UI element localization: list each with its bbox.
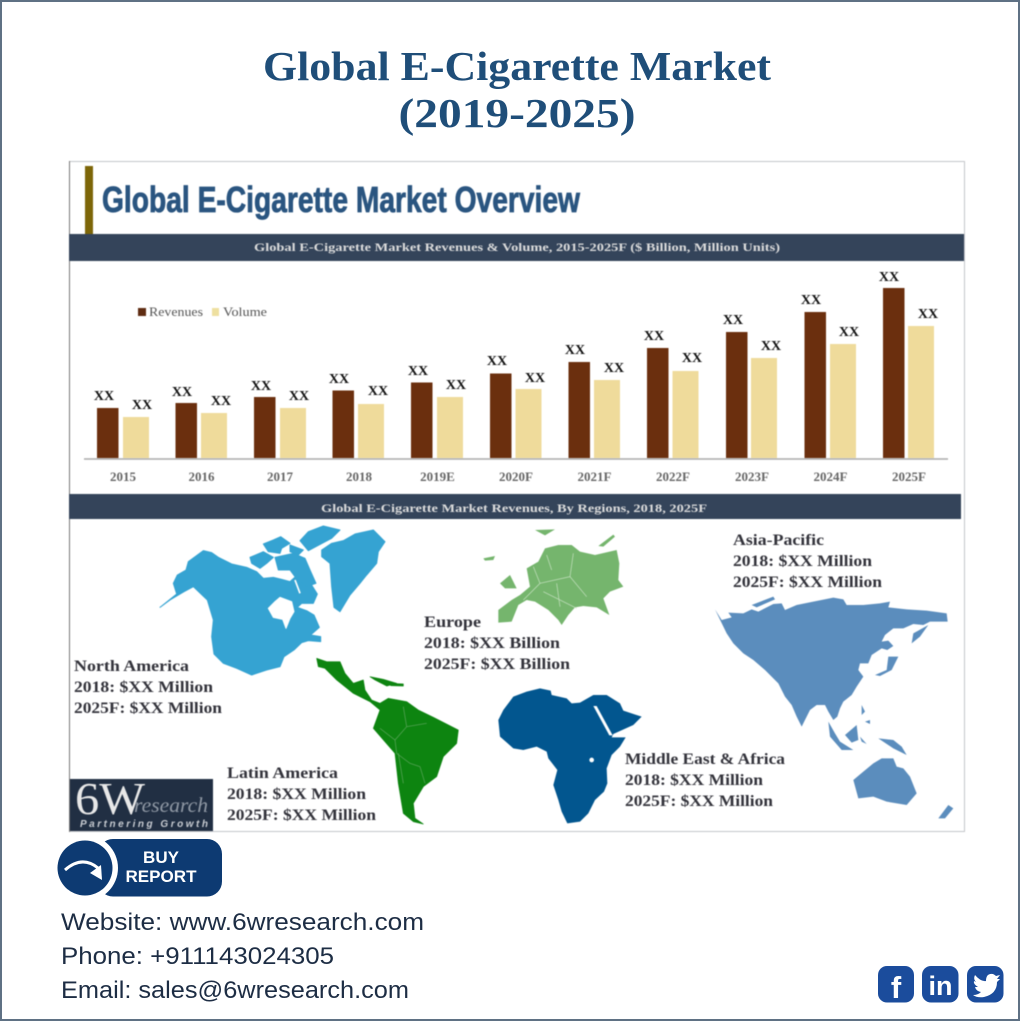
bar chart (84, 270, 948, 484)
overview heading (85, 166, 581, 234)
bar chart: XX (682, 351, 702, 366)
bar chart: XX (368, 384, 388, 399)
contact details: Email: sales@6wresearch.com (61, 977, 409, 1004)
bar chart: XX (723, 313, 743, 328)
chart header bar (69, 234, 964, 261)
logo: 6W research: 6W (75, 773, 146, 824)
bar chart: 2020F (499, 469, 533, 484)
button: buy report (52, 835, 222, 901)
label: North America (74, 658, 222, 717)
label: Middle East and Africa: 2018: $XX Million (625, 772, 763, 789)
bar chart: 2016 (188, 469, 215, 484)
regions header bar (69, 494, 961, 519)
label: North America: 2025F: $XX Million (74, 700, 222, 717)
bar chart: XX (487, 354, 507, 369)
bar chart: XX (918, 307, 938, 322)
logo: 6W research (70, 773, 213, 831)
bar chart: XX (801, 293, 821, 308)
chart header bar: Global E-Cigarette Market Revenues & Volume, 2015-2025F ($ Billion, Million Units) (254, 241, 780, 254)
label: Europe: 2025F: $XX Billion (424, 656, 570, 673)
icon: linkedin: in (928, 971, 952, 1001)
bar chart: XX (329, 372, 349, 387)
bar chart: 2023F (735, 469, 769, 484)
label: North America: 2018: $XX Million (74, 679, 213, 696)
contact details: Website: www.6wresearch.com (61, 909, 424, 936)
label: Asia-Pacific: Asia-Pacific (733, 532, 824, 549)
bar chart: XX (251, 379, 271, 394)
chart legend: Revenues (149, 305, 203, 319)
bar chart: XX (132, 398, 152, 413)
bar chart: 2019E (420, 469, 455, 484)
bar chart: 2025F (892, 469, 926, 484)
panel: market overview (69, 161, 964, 832)
bar chart: XX (94, 389, 114, 404)
button: buy report: BUY (143, 848, 180, 867)
title: (2019-2025) (398, 90, 636, 136)
map: Middle East and Africa (498, 688, 642, 823)
bar chart: XX (289, 389, 309, 404)
chart legend: Volume (223, 305, 268, 319)
bar chart: XX (211, 394, 231, 409)
map: North America (160, 526, 385, 675)
icon: facebook: f (891, 970, 902, 1005)
bar chart: 2022F (656, 469, 690, 484)
label: Asia-Pacific: 2018: $XX Million (733, 553, 872, 570)
icon: twitter (967, 966, 1004, 1002)
map: Asia-Pacific (715, 597, 953, 818)
regions header bar: Global E-Cigarette Market Revenues, By Regions, 2018, 2025F (321, 503, 707, 515)
bar chart: 2018 (346, 469, 372, 484)
icon: linkedin (922, 966, 958, 1002)
title: Global E-Cigarette Market (263, 43, 771, 89)
map: Latin America (317, 658, 458, 824)
bar chart: 2021F (578, 469, 612, 484)
bar chart: XX (525, 371, 545, 386)
contact details (61, 909, 424, 1004)
bar chart: 2017 (267, 469, 294, 484)
label: Middle East and Africa: Middle East & Africa (625, 751, 785, 768)
label: Asia-Pacific (733, 532, 882, 591)
contact details: Phone: +911143024305 (61, 943, 334, 970)
chart legend (138, 305, 268, 319)
bar chart: XX (644, 329, 664, 344)
button: buy report: REPORT (126, 867, 197, 886)
bar chart: 2024F (814, 469, 848, 484)
title (263, 43, 771, 136)
label: North America: North America (74, 658, 189, 675)
logo: 6W research: Partnering Growth (80, 819, 208, 830)
bar chart: XX (761, 339, 781, 354)
logo: 6W research: research (134, 793, 208, 817)
label: Middle East and Africa: 2025F: $XX Million (625, 793, 773, 810)
label: Europe: Europe (424, 614, 481, 631)
label: Latin America (227, 765, 376, 824)
label: Latin America: 2025F: $XX Million (227, 807, 376, 824)
label: Asia-Pacific: 2025F: $XX Million (733, 574, 882, 591)
bar chart: XX (446, 378, 466, 393)
map: Europe (483, 529, 623, 625)
bar chart: XX (565, 343, 585, 358)
label: Latin America: Latin America (227, 765, 338, 782)
bar chart: XX (604, 361, 624, 376)
bar chart: XX (172, 385, 192, 400)
overview heading: Global E-Cigarette Market Overview (102, 179, 581, 220)
label: Europe: 2018: $XX Billion (424, 635, 560, 652)
label: Latin America: 2018: $XX Million (227, 786, 366, 803)
bar chart: XX (879, 270, 899, 285)
label: Europe (424, 614, 570, 673)
bar chart: XX (408, 364, 428, 379)
bar chart: 2015 (110, 469, 136, 484)
label: Middle East and Africa (625, 751, 785, 810)
icon: facebook (878, 966, 914, 1005)
icon: curved arrow (65, 862, 102, 880)
bar chart: XX (839, 325, 859, 340)
